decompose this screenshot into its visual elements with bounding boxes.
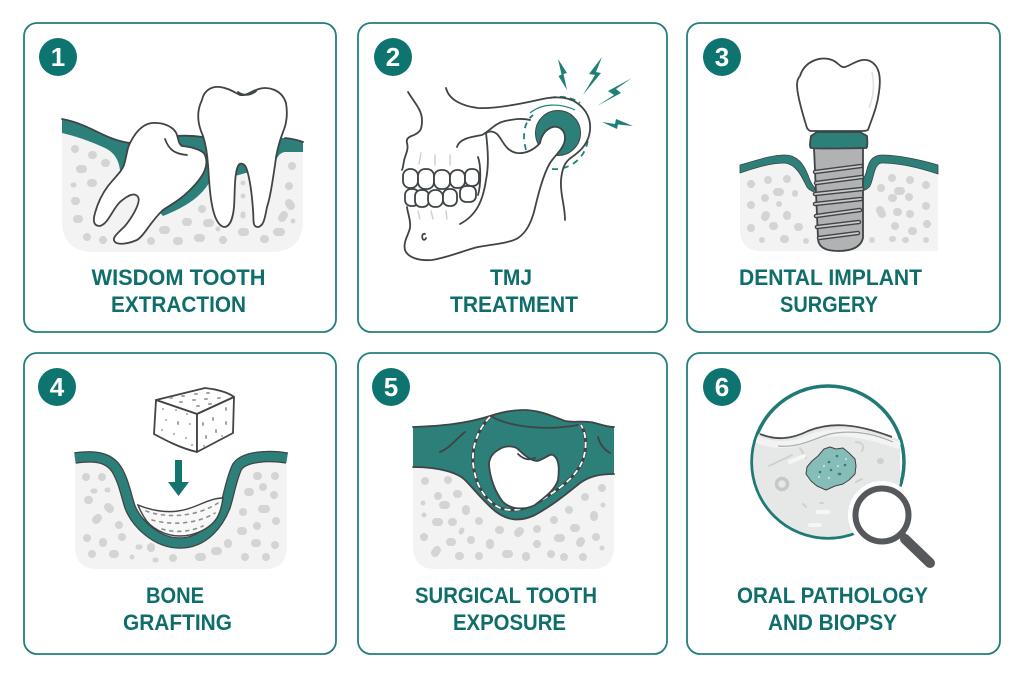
label: DENTAL IMPLANT <box>739 265 922 290</box>
panel: surgical tooth exposure <box>358 353 667 654</box>
badge 2 <box>374 38 412 76</box>
label <box>123 583 232 635</box>
bone block <box>154 388 234 452</box>
label: TMJ <box>490 265 532 290</box>
badge 1: 1 <box>51 42 65 72</box>
label: EXPOSURE <box>453 610 566 635</box>
down arrow <box>168 460 189 496</box>
bone with gum <box>62 119 303 252</box>
mandible <box>405 127 565 260</box>
label <box>450 265 578 317</box>
badge 6: 6 <box>715 372 729 402</box>
molar <box>198 87 287 227</box>
bone socket <box>75 457 287 569</box>
TMJ disc <box>524 97 588 169</box>
label <box>415 583 597 635</box>
magnifying glass <box>848 481 930 563</box>
label: EXTRACTION <box>111 292 246 317</box>
gum layer <box>75 457 287 543</box>
label: TREATMENT <box>450 292 578 317</box>
label <box>92 265 266 317</box>
badge 6 <box>703 368 741 406</box>
label: AND BIOPSY <box>768 610 897 635</box>
label: BONE <box>146 583 204 608</box>
bone <box>413 466 614 569</box>
label: SURGERY <box>780 292 878 317</box>
label <box>739 265 922 317</box>
teeth <box>403 153 480 240</box>
magnified tissue <box>750 386 904 540</box>
label: GRAFTING <box>123 610 232 635</box>
lesion <box>806 447 856 490</box>
label <box>737 583 928 635</box>
label: WISDOM TOOTH <box>92 265 266 290</box>
panel: dental implant surgery <box>687 23 1000 332</box>
bone and gum <box>740 155 938 251</box>
panel: bone grafting <box>24 353 336 654</box>
wisdom tooth <box>94 123 206 244</box>
panel: wisdom tooth extraction <box>24 23 336 332</box>
crown <box>797 59 880 131</box>
graft material <box>138 498 223 536</box>
badge 5 <box>372 368 410 406</box>
panel: oral pathology and biopsy <box>687 353 1000 654</box>
badge 5: 5 <box>384 372 398 402</box>
label: SURGICAL TOOTH <box>415 583 597 608</box>
label: ORAL PATHOLOGY <box>737 583 928 608</box>
gum flap <box>413 410 614 520</box>
pain lightning bolts <box>558 57 633 129</box>
badge 2: 2 <box>386 42 400 72</box>
implant screw <box>810 132 867 251</box>
badge 1 <box>39 38 77 76</box>
badge 3: 3 <box>715 42 729 72</box>
badge 3 <box>703 38 741 76</box>
badge 4: 4 <box>50 372 65 402</box>
exposed tooth <box>489 446 559 508</box>
badge 4 <box>38 368 76 406</box>
panel: TMJ treatment <box>358 23 667 332</box>
skull outline <box>402 88 590 220</box>
